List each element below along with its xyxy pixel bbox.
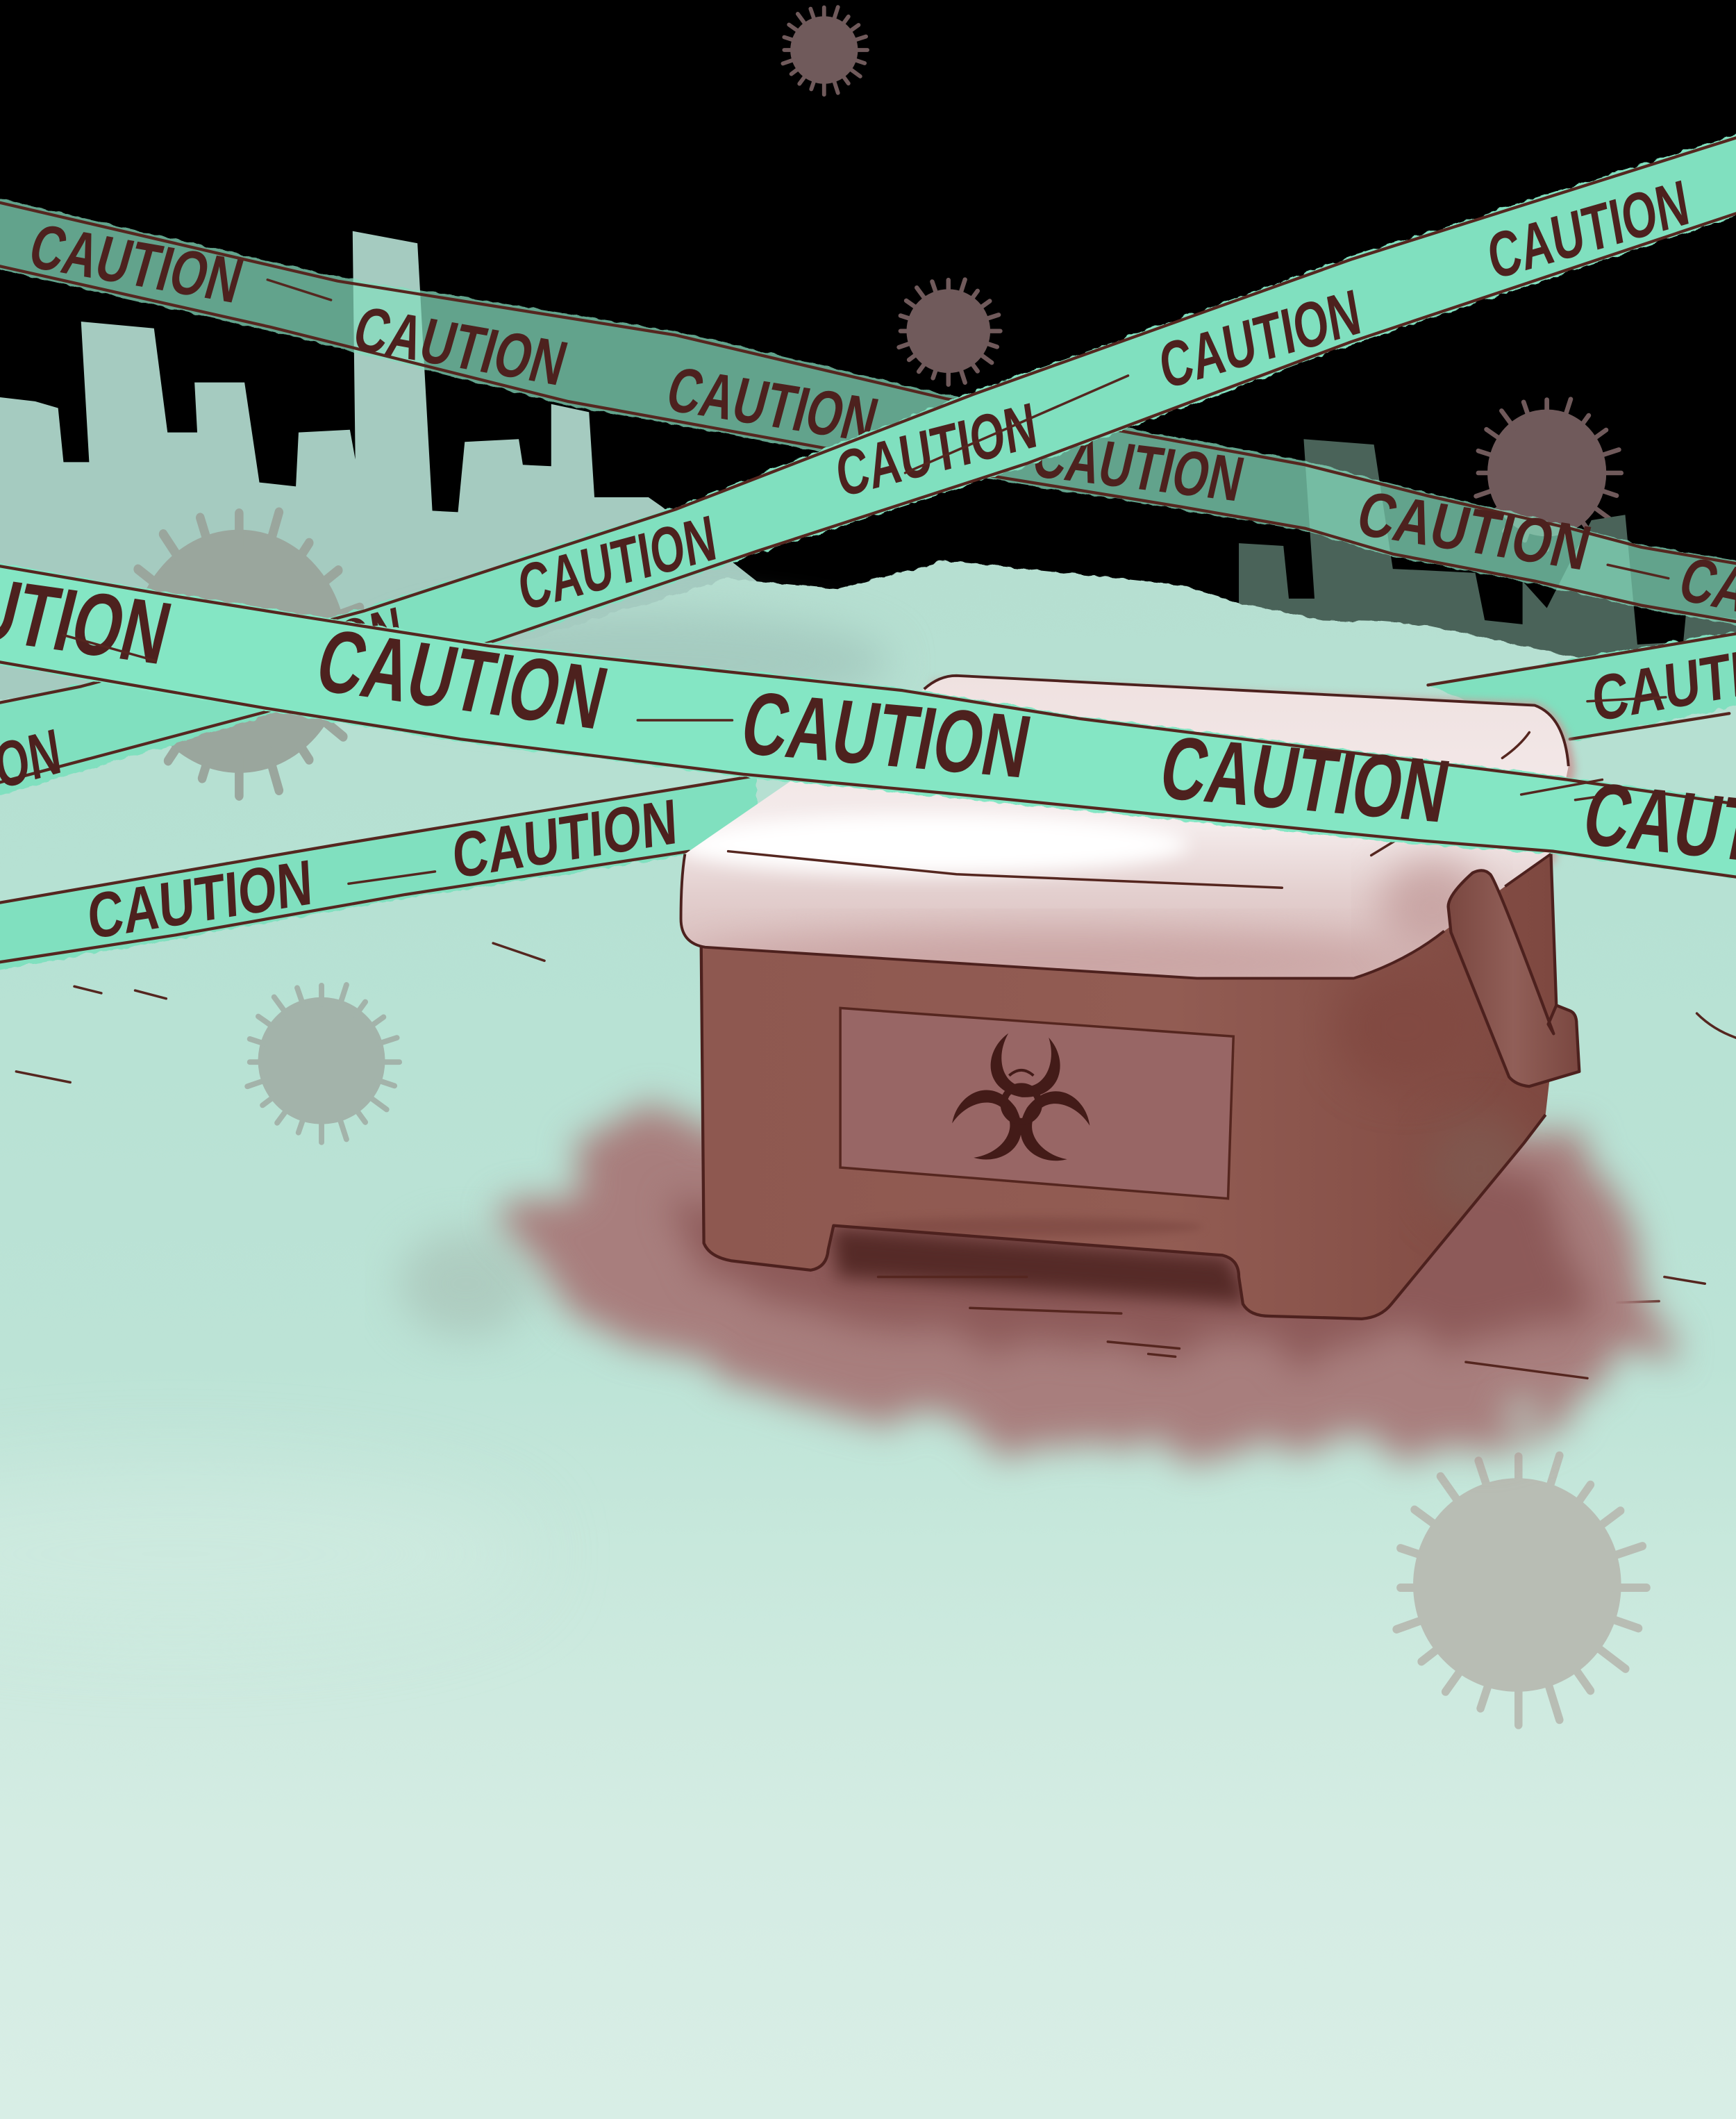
skyline: left city [0,231,756,703]
caution tape: front, main [0,546,1736,892]
caution tape: back, descending: CAUTION [660,354,885,456]
caution tape: back, descending: CAUTION [22,211,250,317]
virus: large left [120,513,364,796]
box handle [1449,870,1579,1086]
icon: biohazard symbol [944,1032,1098,1171]
caution tape: rising across: CAUTION [205,594,408,715]
ground shade [378,610,892,713]
snowy ground [0,560,1736,2119]
caution tape: lower rising: CAUTION [451,786,679,892]
caution tape: lower rising [0,624,1736,977]
caution tape: front, main: CAUTION [734,673,1038,797]
caution tape: front, main: CAUTION [308,610,617,748]
lid halo [932,681,1575,865]
caution tape: back, descending [0,189,1736,657]
virus: top centre [783,7,867,94]
biohazard box [676,676,1579,1319]
caution tape: rising across [0,122,1736,838]
contaminated stain on the ground [399,1115,1669,1452]
caution tape: back, descending: CAUTION [346,294,574,399]
virus: bottom right [1396,1456,1646,1725]
box lid [676,676,1569,992]
caution tape: front, main: CAUTION [1153,718,1457,841]
hazard label [840,1008,1233,1199]
caution tape: rising across: CAUTION [832,390,1041,511]
box body [701,854,1556,1319]
caution tape: rising across: CAUTION [514,502,721,624]
caution tape: back, descending: CAUTION [1026,420,1250,515]
marks under the box [878,1277,1587,1378]
virus: lower left [247,985,399,1142]
ground light cloud [0,1473,527,1635]
caution tape: lower rising: CAUTION [86,847,314,953]
skyline: right city [1239,439,1736,703]
virus: upper middle [899,280,1000,385]
caution tape: rising across: CAUTION [1155,276,1366,403]
ground scratches [16,943,1736,1303]
caution tape: back, descending: CAUTION [1350,479,1598,583]
virus: upper right [1476,399,1621,549]
